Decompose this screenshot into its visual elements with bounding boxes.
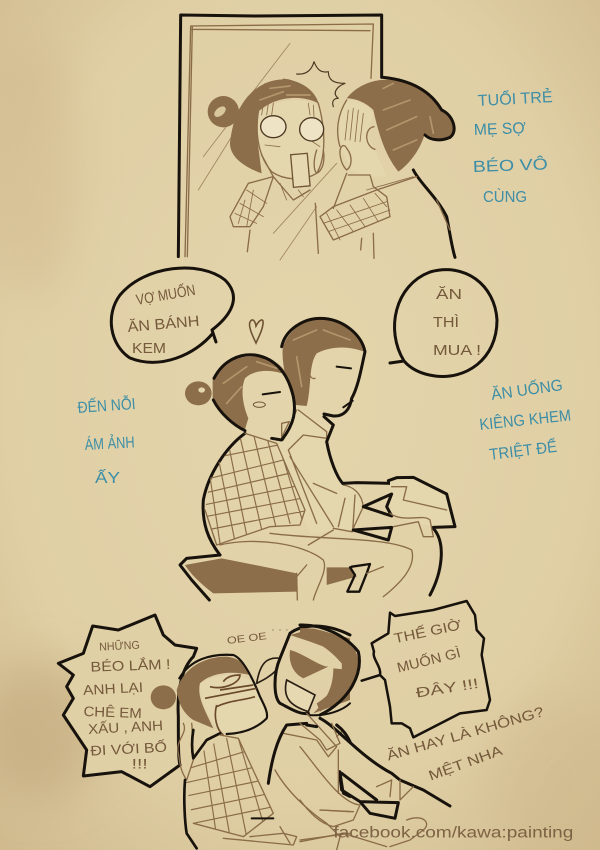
oe oe sound text: . . . xyxy=(272,623,288,634)
speech bubble: thế giờ muốn gì đây: MUỐN GÌ xyxy=(395,643,462,676)
caption: đến nỗi ám ảnh ấy: ĐẾN NỖI xyxy=(77,394,136,417)
speech bubble: vợ muốn ăn bánh kem: ĂN BÁNH xyxy=(127,313,200,336)
real woman from behind xyxy=(320,77,455,258)
oe oe sound text xyxy=(226,623,288,647)
speech bubble: ăn thì mua xyxy=(390,270,497,377)
heart xyxy=(249,320,263,343)
caption: ăn hay là không xyxy=(385,703,546,783)
man's hair and shoulder xyxy=(300,625,450,847)
caption: tuổi trẻ xyxy=(472,87,553,206)
man laughing, head xyxy=(257,626,350,850)
legs xyxy=(220,530,413,600)
speech bubble: những béo lắm: XẤU , ANH xyxy=(88,717,163,737)
surprise burst xyxy=(297,62,345,107)
caption: tuổi trẻ: BÉO VÔ xyxy=(472,154,548,176)
caption: ăn uống kiêng khem triệt để xyxy=(478,374,572,464)
speech bubble: vợ muốn ăn bánh kem: KEM xyxy=(132,340,166,357)
speech bubble: những béo lắm: CHÊ EM xyxy=(83,703,142,721)
glass reflection streaks xyxy=(198,43,337,260)
speech bubble: ăn thì mua: ĂN xyxy=(436,286,462,303)
speech bubble: những béo lắm: NHỮNG xyxy=(99,639,140,654)
mirror frame xyxy=(178,15,382,257)
speech bubble: những béo lắm: !!! xyxy=(132,755,148,771)
caption: ăn uống kiêng khem triệt để: ĂN UỐNG xyxy=(490,374,564,404)
watermark: facebook url: facebook.com/kawa:painting xyxy=(333,824,573,841)
speech bubble: ăn thì mua: THÌ xyxy=(433,314,459,331)
panel: mirror scene xyxy=(178,15,455,260)
speech bubble: thế giờ muốn gì đây xyxy=(362,601,490,737)
panel: bottom couple right xyxy=(300,601,573,847)
speech bubble: thế giờ muốn gì đây: THẾ GIỜ xyxy=(392,616,462,646)
speech bubble: những béo lắm: BÉO LẮM ! xyxy=(90,655,171,675)
speech bubble: vợ muốn ăn bánh kem: VỢ MUỐN xyxy=(135,281,197,309)
caption: đến nỗi ám ảnh ấy xyxy=(77,394,136,487)
caption: ăn hay là không: MỆT NHA xyxy=(426,742,505,783)
speech bubble: thế giờ muốn gì đây: ĐÂY !!! xyxy=(415,675,480,701)
speech bubble: những béo lắm: ANH LẠI xyxy=(83,679,143,698)
caption: ăn uống kiêng khem triệt để: TRIỆT ĐỂ xyxy=(488,437,558,464)
woman xyxy=(185,355,310,555)
speech bubble: những béo lắm: ĐI VỚI BỐ xyxy=(90,738,168,759)
oe oe sound text: OE OE xyxy=(226,631,268,647)
speech bubble: vợ muốn ăn bánh kem xyxy=(111,268,233,362)
caption: ăn hay là không: ĂN HAY LÀ KHÔNG? xyxy=(385,703,546,764)
reflected woman xyxy=(208,79,324,253)
speech bubble: những béo lắm xyxy=(58,615,197,787)
panel: bottom couple left xyxy=(58,615,350,850)
caption: đến nỗi ám ảnh ấy: ÁM ẢNH xyxy=(84,432,135,454)
caption: đến nỗi ám ảnh ấy: ẤY xyxy=(95,468,120,487)
motorbike seat xyxy=(180,555,370,600)
panel: couple on motorbike xyxy=(180,318,455,600)
caption: tuổi trẻ: MẸ SỢ xyxy=(474,120,526,139)
caption: ăn uống kiêng khem triệt để: KIÊNG KHEM xyxy=(478,405,572,434)
handlebar xyxy=(353,477,455,595)
speech bubble: ăn thì mua: MUA ! xyxy=(433,342,481,359)
caption: tuổi trẻ: CÙNG xyxy=(483,187,527,206)
man xyxy=(277,318,392,533)
woman crying xyxy=(151,655,297,848)
caption: tuổi trẻ: TUỔI TRẺ xyxy=(477,87,553,110)
